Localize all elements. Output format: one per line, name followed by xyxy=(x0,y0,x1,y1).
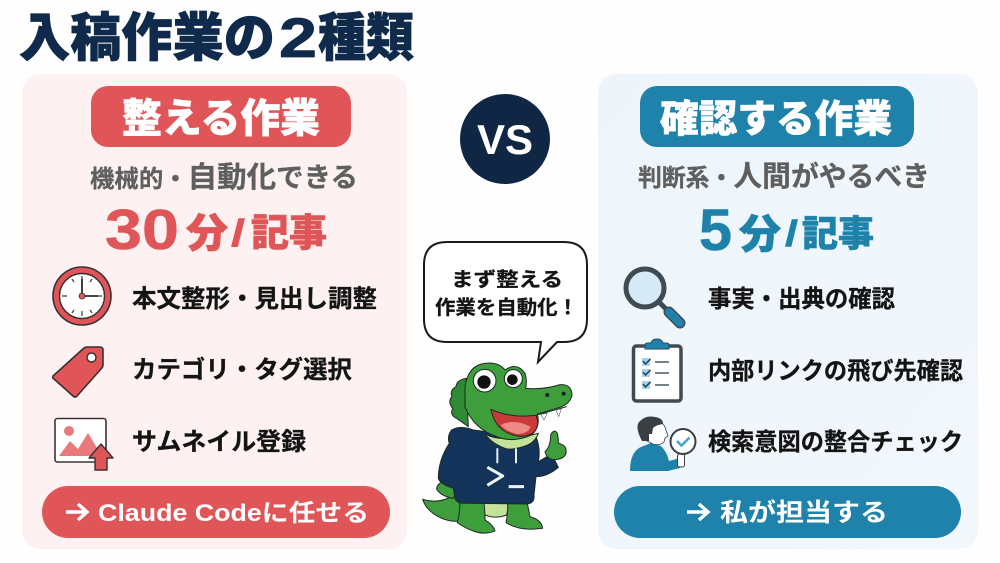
time: 5 minutes per article: 記事 xyxy=(802,213,874,254)
speech bubble: まず整える xyxy=(451,269,563,291)
time: 5 minutes per article: / xyxy=(785,213,798,254)
hoodie xyxy=(438,427,558,504)
time: 5 minutes per article: 5 xyxy=(699,198,732,263)
icon: checklist clipboard xyxy=(634,339,681,401)
time: 30 minutes per article: 分 xyxy=(186,212,228,256)
item: text formatting: 本文整形・見出し調整 xyxy=(132,285,377,313)
time: 5 minutes per article: 分 xyxy=(739,213,781,257)
mouth xyxy=(491,409,538,436)
hood strings xyxy=(497,448,516,463)
panel: checking work xyxy=(598,74,978,549)
mascot: crocodile in hoodie xyxy=(423,363,572,533)
title: 2 xyxy=(279,6,317,69)
time: 5 minutes per article xyxy=(699,198,874,263)
VS badge xyxy=(460,94,550,184)
time: 30 minutes per article: 記事 xyxy=(251,213,327,255)
item: search intent check: 検索意図の整合チェック xyxy=(708,429,963,456)
VS badge: VS xyxy=(477,116,533,163)
teeth xyxy=(541,409,561,420)
title: 種類 xyxy=(318,10,414,68)
heading pill: organizing work xyxy=(91,86,351,147)
panel: organizing work xyxy=(22,74,407,549)
icon: person with check xyxy=(630,416,696,471)
button: I am in charge: 私が担当する xyxy=(720,498,888,527)
item: category and tags: カテゴリ・タグ選択 xyxy=(132,355,352,384)
heading pill: checking work: 確認する作業 xyxy=(660,99,892,141)
time: 30 minutes per article: / xyxy=(231,213,246,255)
speech bubble: 作業を自動化！ xyxy=(435,297,578,319)
heading pill: organizing work: 整える作業 xyxy=(122,97,320,141)
icon: tag xyxy=(53,347,103,397)
button: hand to Claude Code: Claude Codeに任せる xyxy=(98,500,369,527)
item: internal link check: 内部リンクの飛び先確認 xyxy=(708,358,963,385)
time: 30 minutes per article: 30 xyxy=(105,198,179,262)
title: 入稿作業の xyxy=(19,10,275,68)
time: 30 minutes per article xyxy=(105,198,327,262)
icon: clock xyxy=(53,267,111,325)
button: hand to Claude Code xyxy=(42,486,390,538)
item: fact and source check: 事実・出典の確認 xyxy=(708,286,895,313)
legs xyxy=(457,500,495,533)
prompt symbol xyxy=(487,467,503,485)
head and snout xyxy=(465,363,572,440)
subheading: mechanical: 機械的・自動化できる xyxy=(90,161,358,194)
title xyxy=(19,6,414,69)
left hand xyxy=(437,482,457,498)
subheading: judgment: 判断系・人間がやるべき xyxy=(638,160,930,193)
chest xyxy=(485,433,538,449)
thumb-up hand xyxy=(545,431,566,460)
speech bubble xyxy=(424,242,587,362)
icon: magnifying glass xyxy=(626,269,680,323)
tail xyxy=(423,493,465,521)
icon: image upload xyxy=(55,418,113,470)
back spikes xyxy=(450,378,468,427)
item: thumbnail registration: サムネイル登録 xyxy=(132,428,307,456)
button: I am in charge xyxy=(614,486,961,538)
eyes xyxy=(473,369,496,392)
heading pill: checking work xyxy=(640,86,914,147)
